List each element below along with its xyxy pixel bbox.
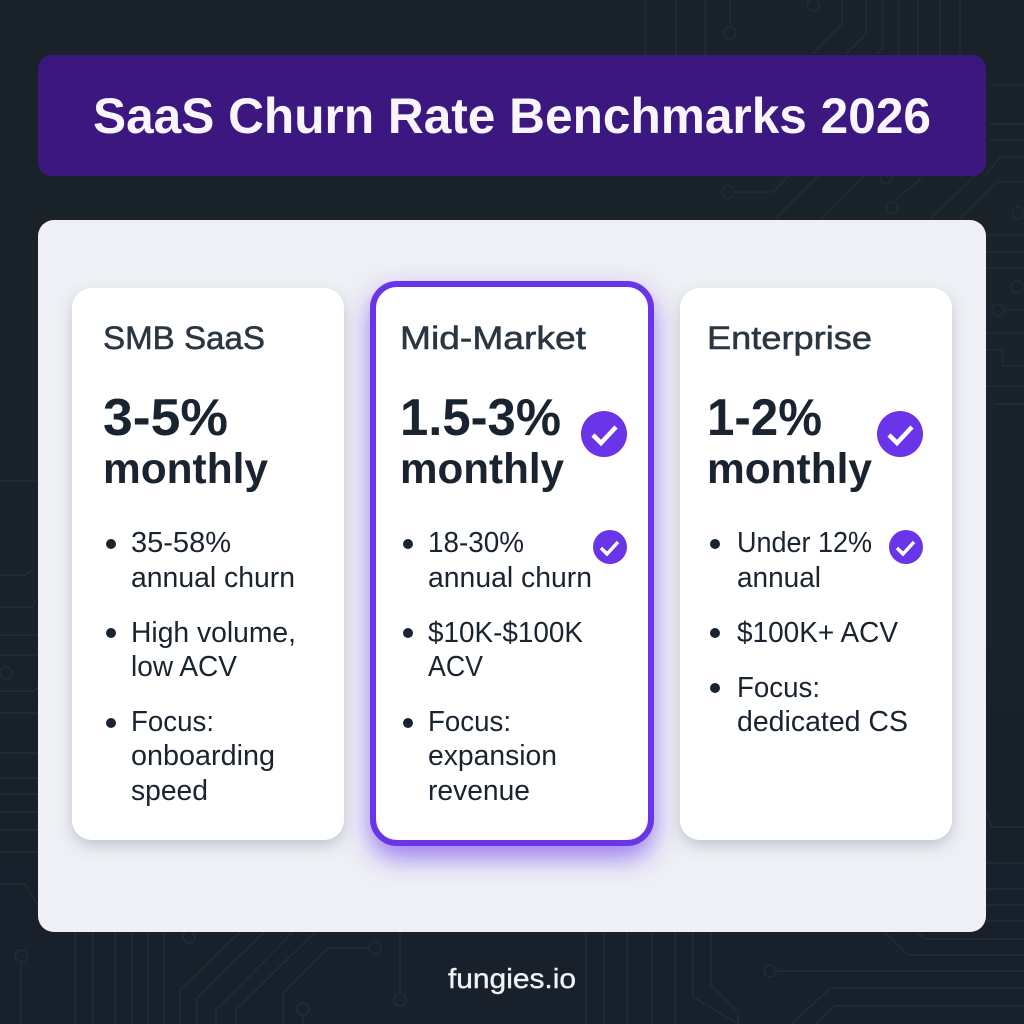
- bullet list: SMB SaaS: speed: [131, 775, 208, 807]
- card: SMB SaaS: [72, 288, 344, 840]
- heading: SMB SaaS: SMB SaaS: [103, 320, 265, 356]
- panel: benchmark cards: [38, 220, 986, 932]
- stat: 1-2% monthly: monthly: [707, 445, 872, 493]
- stat: 1.5-3% monthly: monthly: [400, 445, 564, 493]
- bullet list: Mid-Market: expansion: [428, 740, 557, 772]
- stat: 1.5-3% monthly: 1.5-3%: [400, 389, 561, 447]
- stat: 1.5-3% monthly: [400, 389, 564, 493]
- icon: large check badge: [581, 411, 627, 457]
- bullet list: Mid-Market: [403, 527, 592, 807]
- card: Mid-Market (highlighted): [373, 284, 651, 843]
- bullet list: Enterprise: Focus:: [737, 672, 820, 704]
- stat: 3-5% monthly: [103, 389, 268, 493]
- bullet list: Enterprise: dedicated CS: [737, 706, 908, 738]
- bullet list: Enterprise: $100K+ ACV: [737, 617, 898, 649]
- bullet list: Enterprise: annual: [737, 562, 821, 594]
- icon: small check badge: [889, 530, 923, 564]
- footer brand: fungies.io: [448, 963, 576, 994]
- bullet list: Mid-Market: 18-30%: [428, 527, 524, 559]
- title banner: [38, 55, 986, 176]
- heading: Mid-Market: Mid-Market: [400, 320, 586, 356]
- bullet list: Enterprise: [710, 527, 908, 738]
- bullet list: Mid-Market: annual churn: [428, 562, 592, 594]
- stat: 1-2% monthly: 1-2%: [707, 389, 822, 447]
- bullet list: SMB SaaS: low ACV: [131, 651, 237, 683]
- bullet list: Mid-Market: revenue: [428, 775, 530, 807]
- title: SaaS Churn Rate Benchmarks 2026: [93, 88, 931, 144]
- bullet list: SMB SaaS: High volume,: [131, 617, 296, 649]
- bullet list: SMB SaaS: annual churn: [131, 562, 295, 594]
- bullet list: Mid-Market: $10K-$100K: [428, 617, 583, 649]
- bullet list: SMB SaaS: [106, 527, 296, 807]
- heading: Enterprise: Enterprise: [707, 320, 872, 356]
- icon: small check badge: [593, 530, 627, 564]
- bullet list: SMB SaaS: 35-58%: [131, 527, 231, 559]
- icon: large check badge: [877, 411, 923, 457]
- bullet list: SMB SaaS: onboarding: [131, 740, 275, 772]
- card: Enterprise: [680, 288, 952, 840]
- stat: 1-2% monthly: [707, 389, 872, 493]
- stat: 3-5% monthly: monthly: [103, 445, 268, 493]
- stat: 3-5% monthly: 3-5%: [103, 389, 228, 447]
- bullet list: Mid-Market: ACV: [428, 651, 483, 683]
- bullet list: SMB SaaS: Focus:: [131, 706, 214, 738]
- bullet list: Mid-Market: Focus:: [428, 706, 511, 738]
- bullet list: Enterprise: Under 12%: [737, 527, 872, 559]
